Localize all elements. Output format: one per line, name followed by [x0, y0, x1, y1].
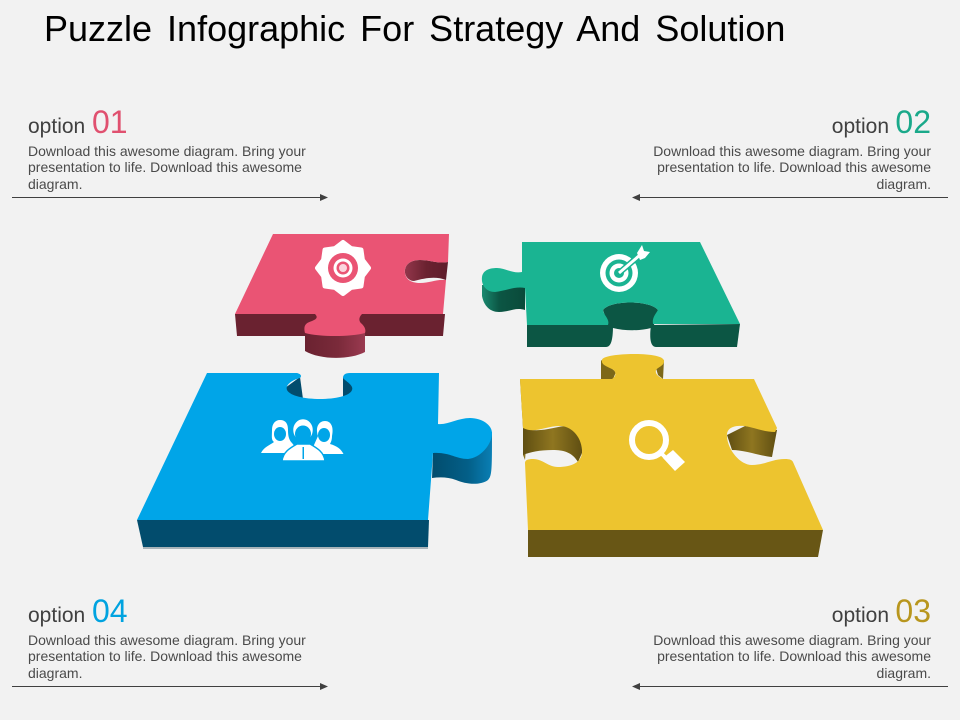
- text block: option 04: Download this awesome diagram. Bring your: [28, 632, 306, 648]
- text block: option 01: Download this awesome diagram. Bring your: [28, 143, 306, 159]
- heading: option 03: 03: [895, 593, 931, 629]
- heading: option 04: option: [28, 604, 85, 627]
- text block: option 04: diagram.: [28, 665, 82, 681]
- title: Puzzle Infographic For Strategy And Solution: [44, 8, 785, 49]
- text block: option 02: Download this awesome diagram. Bring your: [653, 143, 931, 159]
- arrow: option 04: [12, 683, 328, 690]
- icon: magnifying glass: [632, 423, 685, 471]
- heading: option 04: 04: [92, 593, 128, 629]
- puzzle piece: yellow: [520, 354, 823, 557]
- arrow: option 03: [632, 683, 948, 690]
- panel: option 02: [632, 104, 948, 201]
- heading: option 01: option: [28, 115, 85, 138]
- panel: option 03: [632, 593, 948, 690]
- text block: option 01: presentation to life. Download this awesome: [28, 159, 302, 175]
- icon: three people: [261, 418, 344, 461]
- panel: option 01: [12, 104, 328, 201]
- arrow: option 01: [12, 194, 328, 201]
- text block: option 03: presentation to life. Download this awesome: [657, 648, 931, 664]
- text block: option 01: diagram.: [28, 176, 82, 192]
- text block: option 03: diagram.: [877, 665, 931, 681]
- heading: option 03: option: [832, 604, 889, 627]
- heading: option 01: 01: [92, 104, 128, 140]
- icon: target with arrow: [600, 245, 650, 292]
- heading: option 02: 02: [895, 104, 931, 140]
- arrow: option 02: [632, 194, 948, 201]
- puzzle piece: red: [235, 234, 449, 358]
- icon: gear with target: [318, 242, 368, 294]
- text block: option 02: diagram.: [877, 176, 931, 192]
- text block: option 03: Download this awesome diagram. Bring your: [653, 632, 931, 648]
- puzzle piece: blue: [137, 373, 492, 549]
- puzzle piece: green: [482, 242, 740, 347]
- text block: option 04: presentation to life. Download this awesome: [28, 648, 302, 664]
- panel: option 04: [12, 593, 328, 690]
- heading: option 02: option: [832, 115, 889, 138]
- text block: option 02: presentation to life. Download this awesome: [657, 159, 931, 175]
